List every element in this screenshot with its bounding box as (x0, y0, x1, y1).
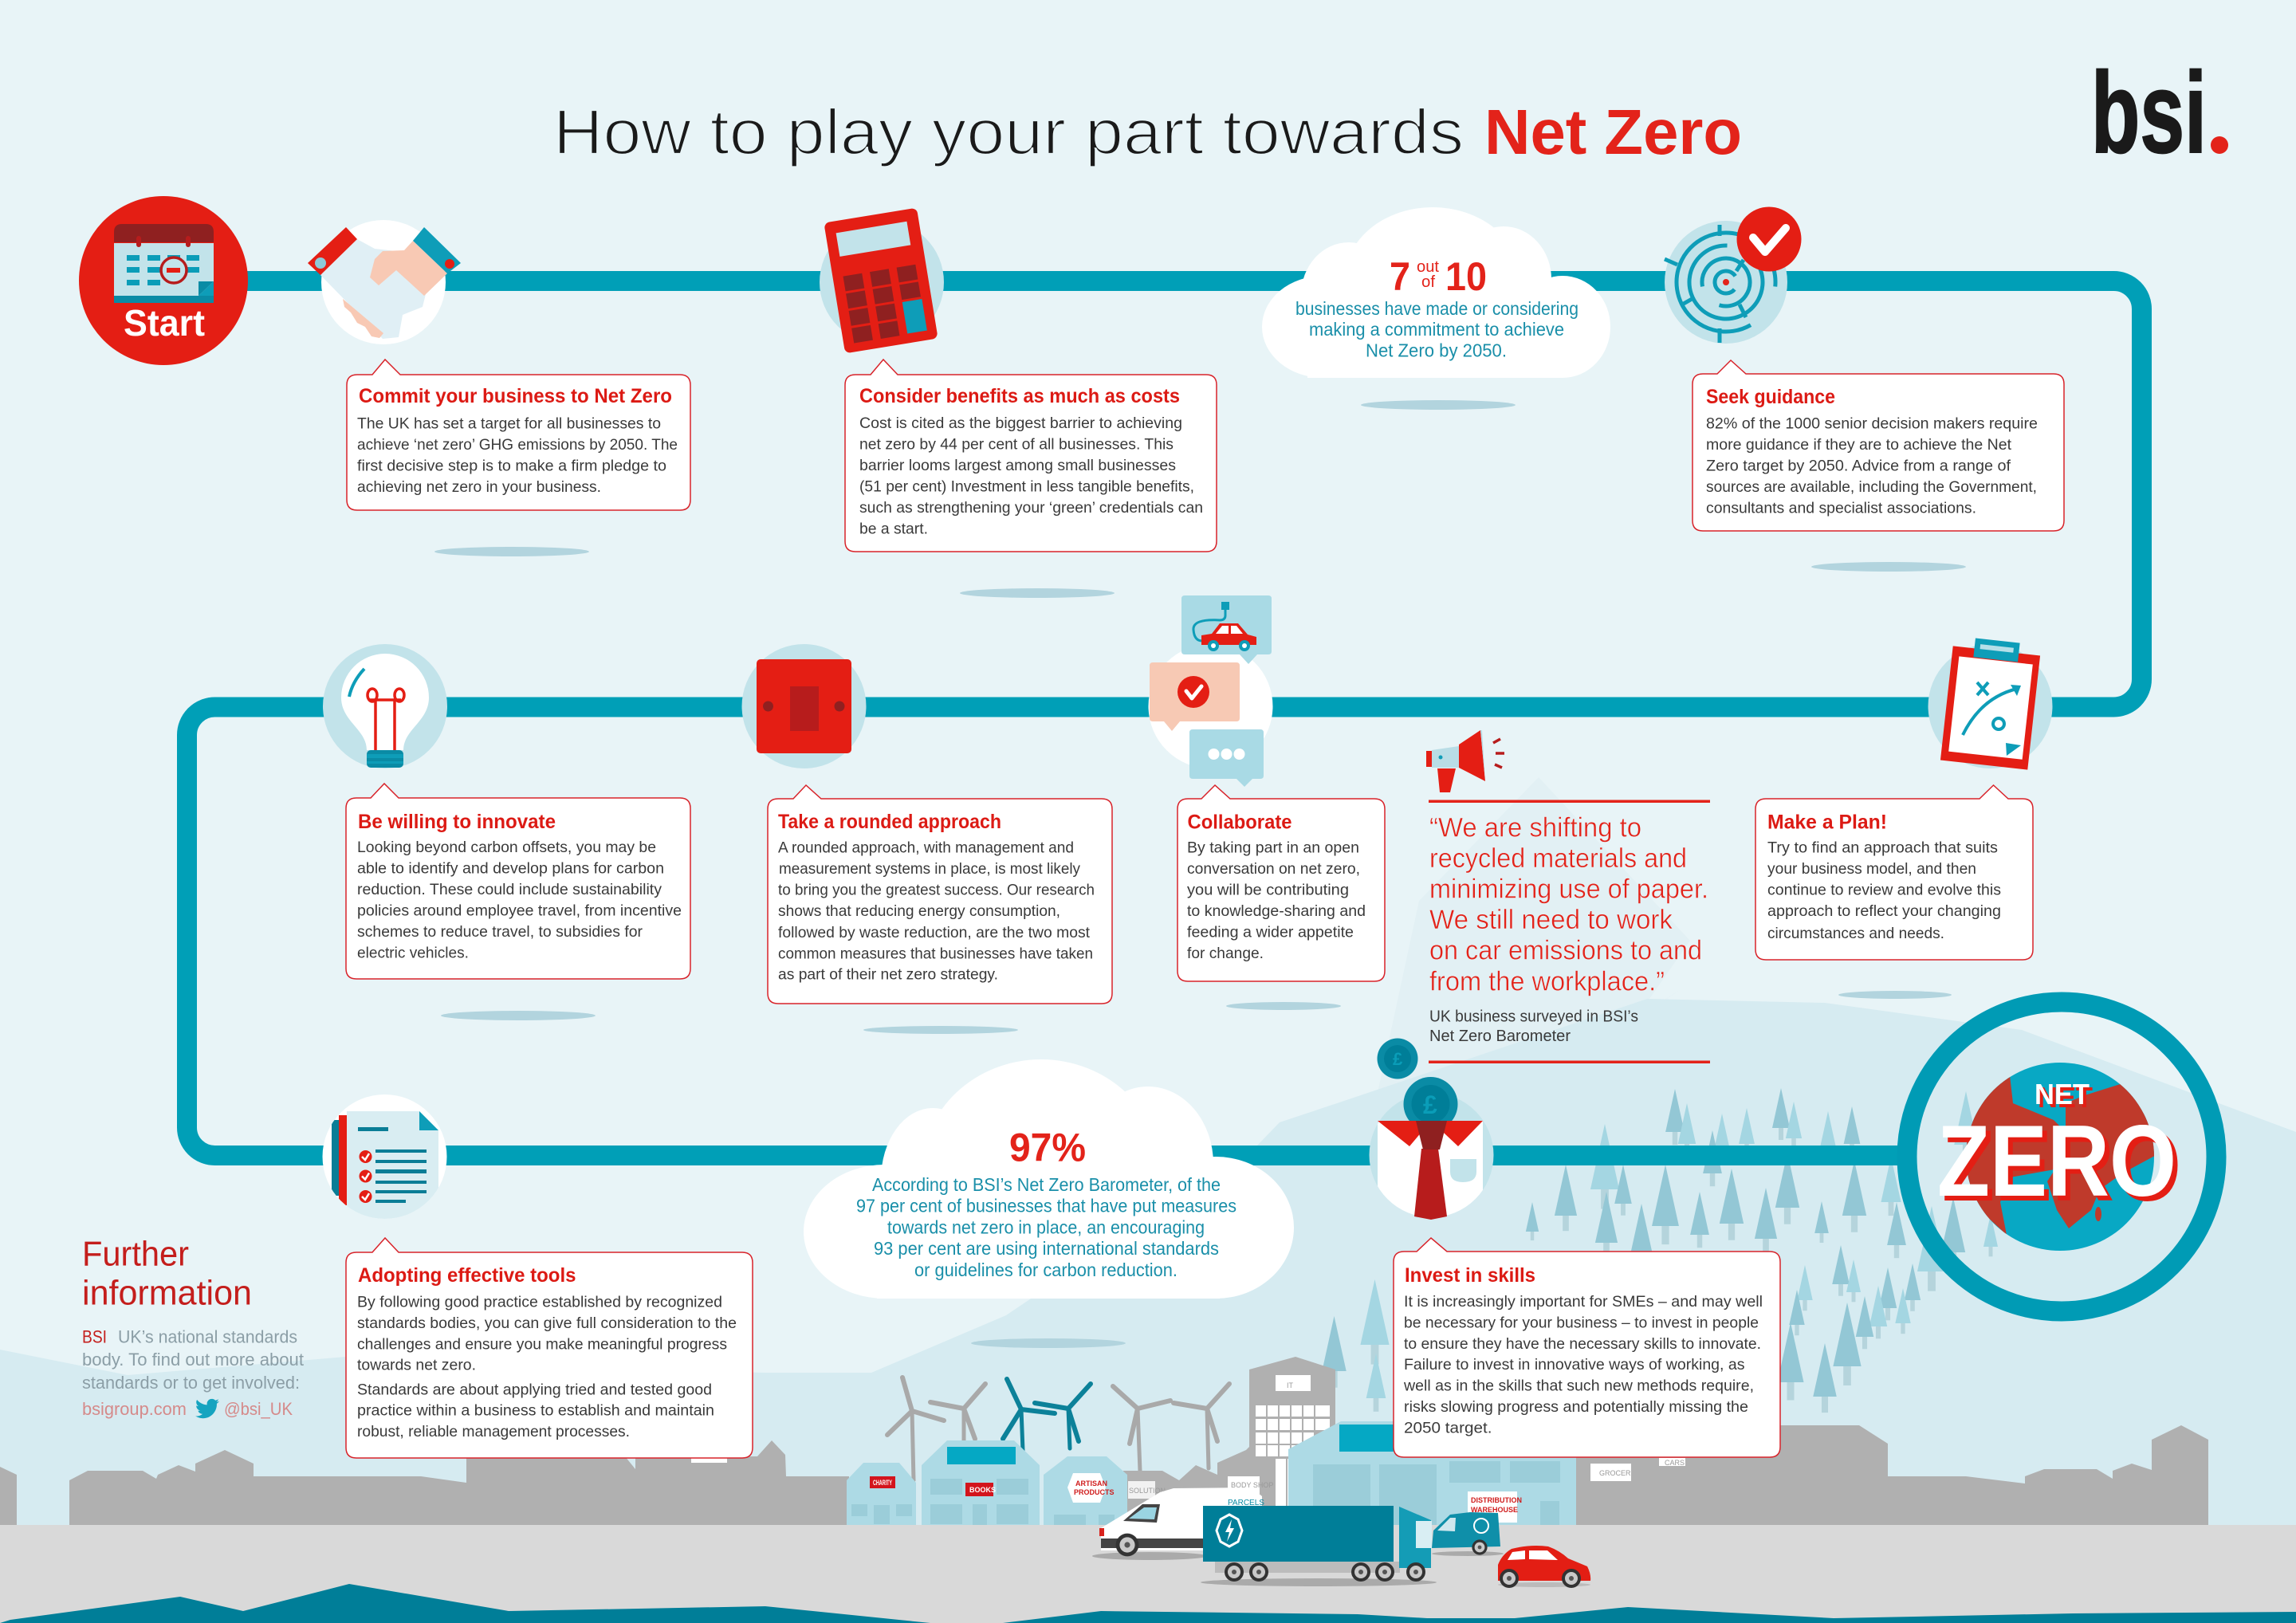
body text (1187, 839, 1366, 962)
start label: Start (124, 302, 205, 344)
heading: Take a rounded approach (778, 811, 1001, 833)
body text: By taking part in an open (1187, 839, 1359, 856)
journey path line (163, 281, 2141, 1156)
heading: Be willing to innovate (358, 811, 556, 833)
body text: schemes to reduce travel, to subsidies for (357, 923, 643, 941)
body text: risks slowing progress and potentially missing the (1404, 1398, 1748, 1416)
heading (82, 1234, 252, 1312)
shadow ellipses (434, 400, 1966, 1348)
globe (1953, 1063, 2160, 1251)
panel: rounded approach (768, 785, 1112, 1004)
body text: to knowledge-sharing and (1187, 902, 1366, 920)
quote (1429, 800, 1710, 1063)
start badge (79, 196, 248, 365)
body text: continue to review and evolve this (1767, 882, 2001, 899)
body text: for change. (1187, 945, 1264, 962)
body text: well as in the skills that such new methods require, (1403, 1377, 1754, 1395)
net zero label: NET (2038, 1081, 2093, 1114)
body text (1403, 1293, 1763, 1436)
teal van (1432, 1512, 1504, 1556)
statistic: 7 (1390, 254, 1410, 299)
body text: 82% of the 1000 senior decision makers require (1706, 415, 2038, 432)
further information (82, 1234, 304, 1419)
heading: Invest in skills (1405, 1264, 1535, 1287)
shops: ARTISAN (1075, 1480, 1107, 1487)
bubble: electric car (1181, 595, 1272, 664)
body text: net zero by 44 per cent of all businesses. This (859, 435, 1174, 453)
body text: Looking beyond carbon offsets, you may be (357, 839, 656, 856)
body text: policies around employee travel, from incentive (357, 902, 682, 920)
icon: maze with tick (1658, 207, 1802, 350)
body text: circumstances and needs. (1767, 925, 1944, 942)
body text (778, 839, 1095, 984)
statistic (1390, 254, 1487, 299)
wind turbines (887, 1377, 1229, 1480)
heading: Seek guidance (1706, 386, 1835, 408)
description: standards or to get involved: (82, 1373, 300, 1393)
statistic: 10 (1445, 254, 1487, 299)
body text (859, 415, 1203, 537)
body text: electric vehicles. (357, 944, 469, 961)
body text: be necessary for your business – to invest in people (1404, 1314, 1759, 1331)
icon: speech bubbles (1148, 595, 1272, 787)
shops: CHARITY (873, 1479, 892, 1487)
shops: PRODUCTS (1074, 1488, 1115, 1496)
heading: Further (82, 1234, 189, 1274)
white van: PARCELS (1228, 1499, 1264, 1507)
icon: megaphone (1426, 730, 1504, 792)
warehouse (1288, 1421, 1576, 1525)
body text: to ensure they have the necessary skills to innovate. (1404, 1335, 1761, 1353)
body text: sources are available, including the Government, (1706, 478, 2037, 496)
warehouse: WAREHOUSE (1471, 1506, 1518, 1514)
quote: from the workplace.” (1429, 966, 1665, 996)
body text: standards bodies, you can give full consideration to the (357, 1315, 737, 1332)
body text: conversation on net zero, (1187, 860, 1360, 878)
body text: By following good practice established by recognized (357, 1293, 722, 1311)
panel: innovate (346, 784, 690, 979)
icon: clipboard plan (1928, 635, 2052, 770)
body text: The UK has set a target for all businesses to (357, 415, 661, 432)
attribution: UK business surveyed in BSI’s (1429, 1008, 1638, 1025)
links (82, 1399, 293, 1419)
body text: first decisive step is to make a firm pledge to (357, 458, 666, 475)
panel: invest in skills (1394, 1238, 1780, 1457)
body text: common measures that businesses have taken (778, 945, 1093, 963)
quote: We still need to work (1429, 905, 1673, 935)
panel: make a plan (1755, 785, 2033, 960)
icon: checklist document (322, 1094, 446, 1220)
net zero label: NET (2035, 1078, 2090, 1110)
quote: minimizing use of paper. (1429, 874, 1708, 905)
cloud text: businesses have made or considering (1295, 298, 1578, 319)
body text: achieving net zero in your business. (357, 478, 601, 496)
body text: It is increasingly important for SMEs – and may well (1404, 1293, 1763, 1311)
body text (1767, 839, 2001, 942)
warehouse: DISTRIBUTION (1471, 1496, 1522, 1504)
description: BSI (82, 1326, 107, 1347)
panel: collaborate (1177, 785, 1385, 981)
heading: Make a Plan! (1767, 812, 1887, 834)
attribution: Net Zero Barometer (1429, 1028, 1571, 1045)
body text: Try to find an approach that suits (1767, 839, 1998, 856)
title: Net Zero (1484, 96, 1742, 167)
body text: such as strengthening your ‘green’ credentials can (859, 499, 1203, 517)
description (82, 1326, 304, 1393)
body text: towards net zero. (357, 1357, 476, 1374)
faint mountain behind quote (1355, 777, 1690, 1196)
grey tower and buildings centre: BODY SHOP (1231, 1481, 1273, 1489)
cloud text: According to BSI’s Net Zero Barometer, of the (872, 1174, 1221, 1195)
icon: light bulb (323, 644, 447, 768)
icon: plug socket (741, 644, 866, 768)
body text: practice within a business to establish and maintain (357, 1401, 714, 1419)
net zero goal (1907, 1002, 2216, 1311)
links: bsigroup.com (82, 1399, 187, 1419)
net zero label: ZERO (1937, 1104, 2176, 1217)
body text: barrier looms largest among small businesses (859, 457, 1176, 474)
body text: (51 per cent) Investment in less tangible benefits, (859, 478, 1194, 496)
shops: BOOKS (969, 1486, 996, 1494)
shops (847, 1440, 1127, 1525)
quote: recycled materials and (1429, 843, 1687, 874)
icon: handshake (308, 220, 461, 344)
panel: commit (347, 360, 690, 510)
body text: A rounded approach, with management and (778, 839, 1074, 856)
grey tower and buildings centre (1123, 1357, 1355, 1525)
body text: Failure to invest in innovative ways of working, as (1404, 1356, 1745, 1373)
body text: measurement systems in place, is most likely (779, 860, 1080, 878)
statistic: of (1421, 273, 1435, 291)
body text: able to identify and develop plans for carbon (357, 859, 664, 877)
cloud text: towards net zero in place, an encouraging (887, 1216, 1205, 1237)
bubble: dots (1189, 729, 1264, 787)
coins (1378, 1038, 1457, 1131)
logo: bsi: bsi (2091, 49, 2207, 177)
grey buildings right (691, 1425, 2208, 1525)
icon: calculator (820, 208, 944, 353)
red car (1498, 1546, 1590, 1588)
description: UK’s national standards (118, 1326, 297, 1347)
body text: robust, reliable management processes. (357, 1423, 630, 1440)
body text: as part of their net zero strategy. (778, 966, 998, 984)
icon: calendar (114, 224, 214, 303)
panel: consider (845, 360, 1217, 552)
cloud text: 97 per cent of businesses that have put measures (856, 1196, 1236, 1216)
white van (1092, 1487, 1264, 1560)
cloud: 7 out of 10 (1262, 207, 1610, 378)
coins: £ (1393, 1049, 1403, 1069)
body text: 2050 target. (1404, 1419, 1492, 1436)
body text: to bring you the greatest success. Our research (778, 882, 1095, 899)
grey tower and buildings centre: SOLUTION (1129, 1487, 1166, 1495)
body text: approach to reflect your changing (1767, 902, 2001, 920)
road (0, 1525, 2296, 1623)
heading: Adopting effective tools (358, 1264, 576, 1287)
cloud text (856, 1174, 1236, 1280)
cloud text: Net Zero by 2050. (1366, 340, 1507, 360)
body text: more guidance if they are to achieve the Net (1706, 436, 2012, 454)
cloud text: or guidelines for carbon reduction. (914, 1259, 1177, 1280)
title: How to play your part towards (553, 96, 1464, 167)
bubble: tick (1150, 662, 1240, 731)
body text: consultants and specialist associations. (1706, 499, 1976, 517)
body text (1706, 415, 2038, 517)
description: body. To find out more about (82, 1350, 304, 1370)
body text: be a start. (859, 520, 928, 537)
attribution (1429, 1008, 1638, 1045)
body text: feeding a wider appetite (1187, 923, 1354, 941)
icon: coins and shirt (1370, 1038, 1494, 1220)
grey tower and buildings centre: IT (1287, 1381, 1294, 1389)
cloud: 97% (804, 1059, 1294, 1299)
grey buildings right: GROCER (1599, 1469, 1631, 1477)
hills (0, 999, 2296, 1525)
body text (357, 1293, 737, 1440)
body text: Standards are about applying tried and tested good (357, 1381, 712, 1398)
quote: on car emissions to and (1429, 936, 1702, 966)
grey buildings left (0, 1440, 849, 1525)
body text: challenges and ensure you make meaningful progress (357, 1336, 727, 1354)
quote: “We are shifting to (1429, 813, 1641, 843)
body text: achieve ‘net zero’ GHG emissions by 2050. The (357, 436, 678, 454)
net zero label: ZERO (1942, 1109, 2181, 1222)
coins: £ (1423, 1091, 1437, 1119)
body text: your business model, and then (1767, 860, 1976, 878)
heading: Consider benefits as much as costs (859, 385, 1180, 407)
forest (1322, 1088, 1998, 1413)
body text: reduction. These could include sustainability (357, 881, 662, 898)
body text: you will be contributing (1187, 882, 1349, 899)
panel: adopting tools (346, 1238, 753, 1458)
heading: information (82, 1274, 252, 1312)
panel: seek guidance (1693, 360, 2064, 531)
heading: Collaborate (1188, 812, 1292, 834)
heading: Commit your business to Net Zero (359, 385, 672, 407)
statistic: out (1417, 258, 1439, 276)
ring (1907, 1002, 2216, 1311)
lorry (1201, 1506, 1437, 1586)
cloud text (1295, 298, 1578, 360)
body text: Zero target by 2050. Advice from a range of (1706, 458, 2011, 475)
body text: followed by waste reduction, are the two most (778, 924, 1091, 941)
body text: Cost is cited as the biggest barrier to achieving (859, 415, 1182, 432)
links: @bsi_UK (224, 1399, 293, 1419)
grey buildings right: CARS (1665, 1459, 1685, 1467)
cloud text: 93 per cent are using international standards (874, 1238, 1219, 1259)
body text: shows that reducing energy consumption, (778, 902, 1060, 920)
water strip (0, 1584, 2296, 1623)
cloud text: making a commitment to achieve (1309, 319, 1564, 340)
body text (357, 415, 678, 496)
statistic: 97% (1009, 1126, 1086, 1170)
body text (357, 839, 682, 961)
